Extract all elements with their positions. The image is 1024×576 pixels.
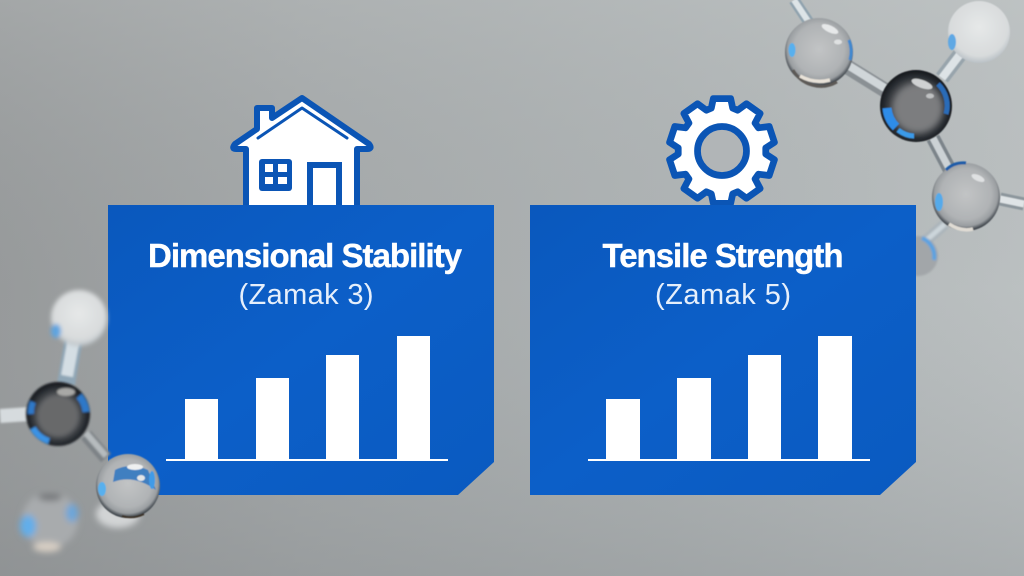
molecule: upper right, behind panel: [898, 224, 945, 276]
bonds: [794, 0, 1024, 204]
white atom: [51, 290, 107, 346]
bar chart: [166, 336, 448, 461]
heading: Tensile Strength: [602, 237, 844, 274]
panel: tensile strength: [530, 205, 916, 495]
subheading: (Zamak 3): [238, 279, 374, 311]
blurred glass atoms: [20, 492, 140, 552]
white atom: [948, 1, 1010, 63]
bonds: [0, 338, 106, 458]
icon: gear: [670, 99, 774, 203]
molecule: lower left: [0, 290, 160, 552]
icon: house: [233, 98, 371, 212]
glass atom right: [932, 163, 1000, 231]
panel background: [530, 205, 916, 495]
panel background: [108, 205, 494, 495]
molecule: upper right: [785, 0, 1024, 231]
clear glass atom: [96, 454, 160, 518]
heading: Dimensional Stability: [148, 237, 463, 274]
bar chart: [588, 336, 870, 461]
dark atom: [880, 70, 952, 142]
dark atom: [26, 382, 90, 446]
glass atom top: [785, 18, 853, 86]
panel: dimensional stability: [108, 205, 494, 495]
subheading: (Zamak 5): [655, 279, 791, 311]
